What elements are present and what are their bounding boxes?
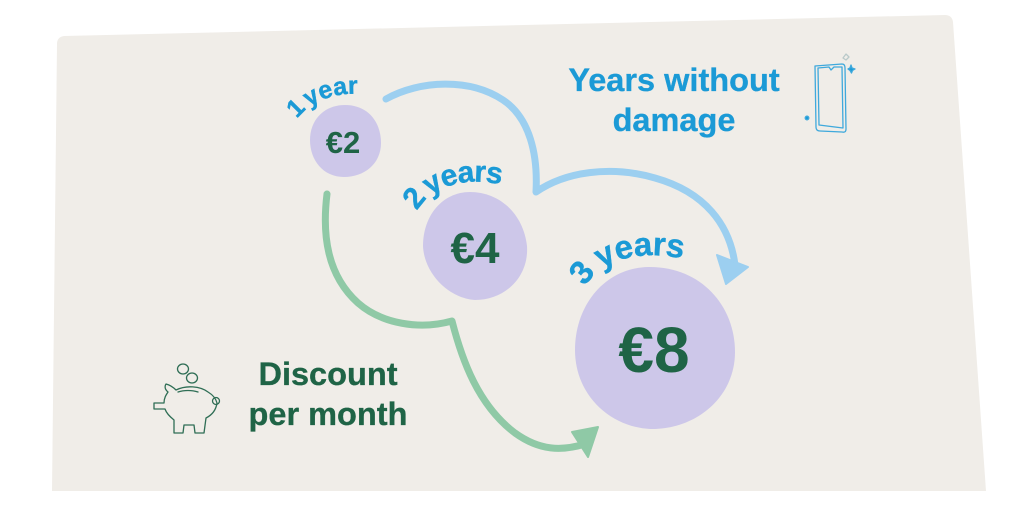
label: 3 years: 3 years [570,238,684,284]
heading: discount per month: per month [249,396,407,432]
blob: 3 years discount [575,267,735,429]
blob: 1 year discount: €2 [326,125,360,160]
arrow: years without damage [386,84,748,284]
icon: phone with sparkles [805,54,855,132]
arrow: discount per month [325,194,598,457]
icon: piggy bank with coins [154,364,220,433]
heading: discount per month: Discount [258,356,398,392]
blob: 2 years discount [423,192,527,300]
label: 2 years: 2 years [403,166,502,210]
heading: years without damage: Years without [568,62,780,98]
blob: 1 year discount [310,105,381,177]
blob: 2 years discount: €4 [451,224,500,273]
label: 1 year: 1 year [287,80,358,118]
heading: years without damage: damage [613,102,735,138]
blob: 3 years discount: €8 [618,314,690,386]
